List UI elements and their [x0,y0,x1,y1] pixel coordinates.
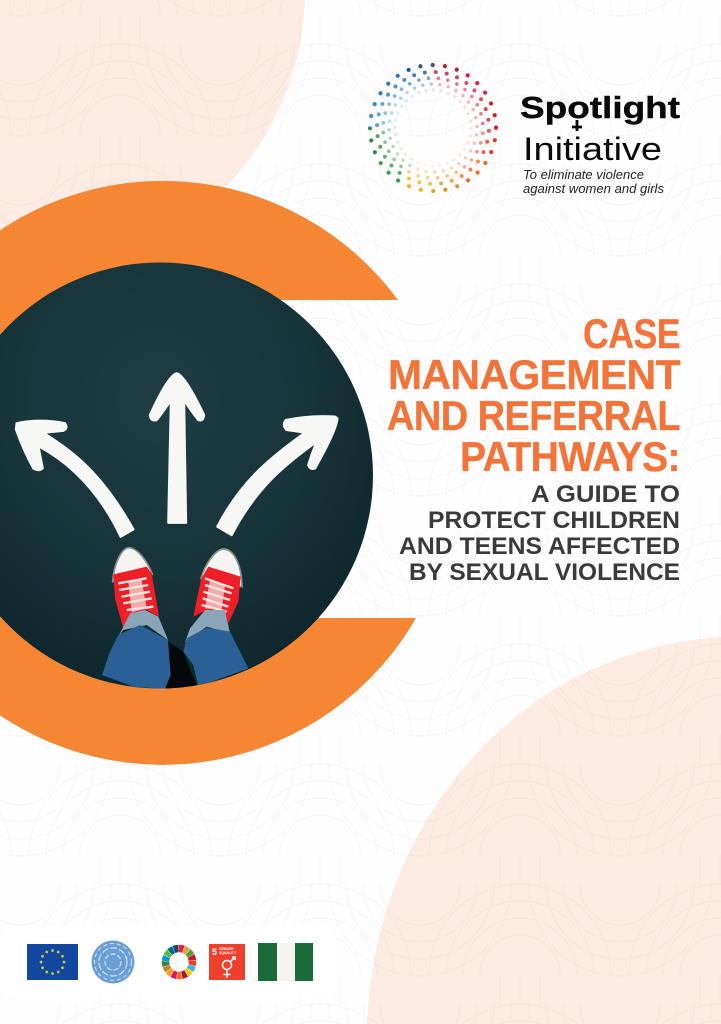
logo: Spotlight Initiative [370,65,680,196]
right shoe [193,549,242,623]
icon: SDG goal 5: GENDER [219,947,234,951]
dotted colour ring [370,65,496,191]
wordmark Spotlight: Spotlight [520,90,680,125]
title: CASE [583,310,680,357]
icon: UN emblem [92,940,134,984]
left shoe [113,548,159,628]
chalk arrow left [16,421,133,537]
subtitle: PROTECT CHILDREN [428,507,680,534]
jeans [102,625,248,689]
photo: feet and chalk arrows [0,262,374,689]
orange ring [0,181,416,765]
title: PATHWAYS: [460,433,680,480]
subtitle: BY SEXUAL VIOLENCE [409,559,680,586]
female symbol [572,120,582,131]
peach circle bottom right [367,637,721,1024]
jeans cuffs [118,610,230,642]
subtitle [399,481,680,586]
icon: SDG goal 5: EQUALITY [219,951,237,955]
wordmark Initiative: Initiative [523,131,662,167]
icon: SDG wheel [166,948,192,976]
partner logos strip [0,926,336,998]
chalk arrow right [217,416,337,535]
tagline: against women and girls [523,182,664,196]
subtitle: AND TEENS AFFECTED [399,533,680,560]
icon: SDG goal 5 [209,944,245,980]
icon: Nigeria flag [258,943,313,981]
peach circle top left [0,0,305,275]
chalk arrow centre [150,373,204,523]
tagline [523,168,664,196]
icon: SDG goal 5: 5 [212,947,217,957]
shadow between legs [165,642,197,689]
tagline: To eliminate violence [523,168,644,182]
title: AND REFERRAL [387,392,680,439]
title: MANAGEMENT [388,351,681,398]
title [387,310,681,480]
icon: EU flag [27,944,78,980]
subtitle: A GUIDE TO [531,481,680,508]
